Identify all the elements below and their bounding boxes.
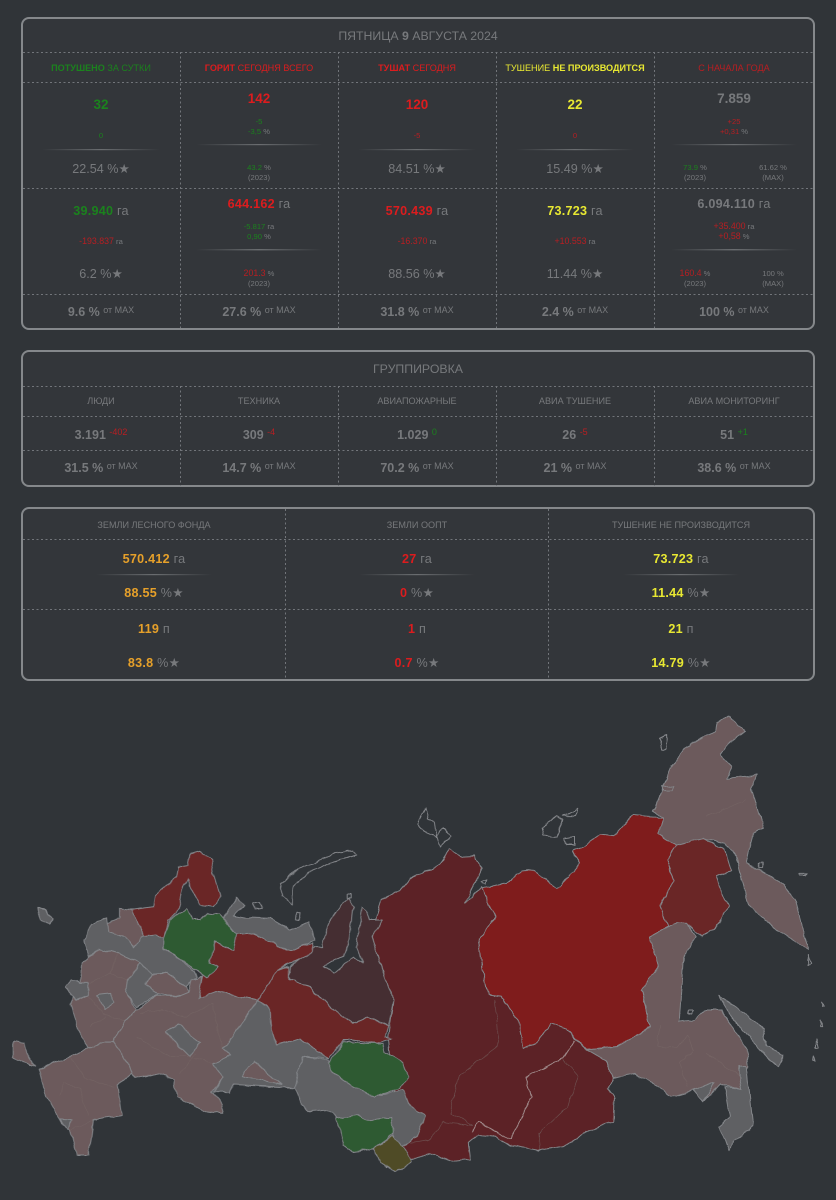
force share of maximum: 21 % (544, 461, 572, 475)
column 1 fire counts (42, 97, 160, 176)
column 2 area: (2023) (248, 279, 270, 288)
region: central Russia (70, 948, 140, 1048)
column 4 area: 11.44 %★ (547, 267, 603, 281)
column 2 area: -5.817 га (244, 222, 275, 231)
islands: eastern (417, 735, 823, 1060)
force counts: -5 (580, 427, 588, 437)
column 3 area: 570.439 га (386, 204, 448, 218)
region: Grey north-west (83, 918, 197, 987)
region: Arkhangelsk (162, 908, 237, 978)
region: Sakhalin (718, 995, 783, 1067)
force share of maximum: от MAX (423, 461, 454, 471)
column 5 area: (MAX) (762, 279, 784, 288)
force share of maximum: 14.7 % (222, 461, 261, 475)
force counts: 0 (432, 427, 437, 437)
column: protected areas: 1 п (408, 622, 426, 636)
column 1 area (73, 204, 129, 281)
share of maximum row: 100 % (699, 305, 735, 319)
column: no extinguishing: 21 п (668, 622, 694, 636)
panel: forces deployed (22, 351, 814, 486)
force share of maximum: 38.6 % (697, 461, 736, 475)
column 3 fire counts: 84.51 %★ (388, 162, 446, 176)
region: Altai (337, 1115, 393, 1152)
column header: since start of year: С НАЧАЛА ГОДА (698, 63, 771, 73)
force share of maximum: от MAX (265, 461, 296, 471)
column: protected areas: ЗЕМЛИ ООПТ (387, 520, 448, 530)
column 1 fire counts: 22.54 %★ (72, 162, 130, 176)
column: protected areas: 27 га (402, 552, 432, 566)
column header: being extinguished: ТУШАТ СЕГОДНЯ (378, 63, 456, 73)
column 2 area: 201.3 % (244, 268, 275, 278)
force counts: 3.191 (75, 428, 106, 442)
region: Kaliningrad (37, 908, 53, 925)
column 3 fire counts: 120 (406, 97, 428, 112)
column 5 fire counts (671, 91, 797, 182)
column 2 area: 0,90 % (247, 232, 271, 241)
column header: burning: ГОРИТ СЕГОДНЯ ВСЕГО (205, 63, 313, 73)
force share of maximum (64, 461, 771, 475)
column: forest fund lands: 119 п (138, 622, 170, 636)
column 5 area: 6.094.110 га (697, 197, 771, 211)
column 5 area: 100 % (762, 269, 784, 278)
column: forest fund lands: 83.8 %★ (128, 656, 180, 670)
column 2 area (196, 197, 322, 288)
column: forest fund lands (96, 520, 212, 670)
share of maximum row: 2.4 % (542, 305, 574, 319)
column 4 fire counts: 22 (567, 97, 583, 112)
region: Crimea (13, 1042, 35, 1067)
region: Pink north-west (107, 908, 145, 947)
column 1 fire counts: 32 (93, 97, 109, 112)
column 5 fire counts: 7.859 (717, 91, 751, 106)
column 5 fire counts: (2023) (684, 173, 706, 182)
column 2 fire counts: 142 (248, 91, 270, 106)
column: forest fund lands: 570.412 га (123, 552, 185, 566)
force counts: +1 (738, 427, 748, 437)
column 3 fire counts (358, 97, 476, 176)
column 5 area (671, 197, 797, 288)
column 4 area: +10.553 га (555, 236, 596, 246)
share of maximum row: 27.6 % (222, 305, 261, 319)
column 4 area (547, 204, 603, 281)
force counts: -402 (109, 427, 127, 437)
region: Khabarovsk and Amur (587, 923, 748, 1102)
column labels: ТЕХНИКА (238, 396, 281, 406)
column: protected areas (359, 520, 475, 670)
column 2 area: 644.162 га (228, 197, 290, 211)
column: no extinguishing: ТУШЕНИЕ НЕ ПРОИЗВОДИТСЯ (612, 520, 750, 530)
region: Taymyr strip (288, 898, 393, 1027)
force counts: 26 (562, 428, 576, 442)
column labels: АВИА МОНИТОРИНГ (688, 396, 780, 406)
force counts: 309 (243, 428, 264, 442)
region: Magadan (660, 838, 732, 937)
force counts: 1.029 (397, 428, 428, 442)
column 1 fire counts: 0 (99, 131, 103, 140)
share of maximum row: от MAX (103, 305, 134, 315)
share of maximum row: 31.8 % (380, 305, 419, 319)
region: Nenets (220, 897, 315, 950)
force share of maximum: от MAX (740, 461, 771, 471)
region: Volga (113, 977, 258, 1113)
region: Komi (198, 933, 313, 1000)
region: Krasnoyarsk and south Siberia (372, 848, 614, 1167)
column 5 fire counts: +25 (728, 117, 740, 126)
column header: extinguished: ПОТУШЕНО ЗА СУТКИ (51, 63, 151, 73)
region: pink Kurgan (242, 1062, 282, 1085)
region: Primorye (718, 1067, 753, 1152)
share of maximum row (68, 305, 769, 319)
region: Samara (165, 1025, 200, 1057)
column labels: АВИАПОЖАРНЫЕ (377, 396, 457, 406)
force share of maximum: от MAX (107, 461, 138, 471)
column 5 fire counts: +0,31 % (720, 127, 748, 136)
column 5 area: +35.400 га (714, 221, 755, 231)
share of maximum row: от MAX (738, 305, 769, 315)
region: Omsk and Novosibirsk (295, 1057, 425, 1148)
column: protected areas: 0.7 %★ (394, 656, 440, 670)
column 2 fire counts: -5 (256, 117, 262, 126)
region: Urals (213, 1000, 328, 1092)
region: grey centre (127, 963, 158, 1007)
column 4 fire counts: 0 (573, 131, 577, 140)
title: date: ПЯТНИЦА 9 АВГУСТА 2024 (338, 29, 498, 43)
column 1 area: -193.837 га (79, 236, 124, 246)
column: protected areas: 0 %★ (400, 586, 434, 600)
column: no extinguishing (612, 520, 750, 670)
column 2 fire counts: -3,5 % (248, 127, 270, 136)
column labels: ЛЮДИ (87, 396, 115, 406)
column 3 area: 88.56 %★ (388, 267, 446, 281)
column 1 area: 39.940 га (73, 204, 129, 218)
column 5 fire counts: 61.62 % (759, 163, 787, 172)
region: Tomsk (328, 1042, 408, 1097)
region: Smolensk (65, 978, 88, 1000)
column 2 fire counts (196, 91, 322, 182)
column 3 area (386, 204, 448, 281)
map: eastern regions (372, 715, 823, 1167)
region: Chukotka and Kamchatka (653, 715, 808, 950)
column 3 fire counts: -5 (414, 131, 420, 140)
map of Russia (13, 715, 823, 1172)
column 2 fire counts: (2023) (248, 173, 270, 182)
force share of maximum: 31.5 % (64, 461, 103, 475)
column labels (87, 396, 780, 406)
panel: daily fire statistics (22, 18, 814, 329)
force counts: -4 (267, 427, 275, 437)
share of maximum row: от MAX (265, 305, 296, 315)
column 5 fire counts: 73.9 % (683, 163, 707, 172)
column: no extinguishing: 11.44 %★ (652, 586, 710, 600)
region: Yakutia (478, 815, 677, 1049)
column header: no extinguishing: ТУШЕНИЕ НЕ ПРОИЗВОДИТСЯ (505, 63, 645, 73)
region: Jewish autonomous (693, 1082, 715, 1102)
region: south (38, 1042, 132, 1155)
column 5 fire counts: (MAX) (762, 173, 784, 182)
panel: land categories (22, 508, 814, 680)
force share of maximum: от MAX (576, 461, 606, 471)
column 5 area: +0,58 % (718, 231, 750, 241)
column 4 fire counts: 15.49 %★ (546, 162, 604, 176)
column: forest fund lands: 88.55 %★ (124, 586, 184, 600)
region: Moscow (97, 993, 113, 1010)
column: no extinguishing: 73.723 га (653, 552, 709, 566)
column 4 fire counts (516, 97, 634, 176)
column 5 area: (2023) (684, 279, 706, 288)
share of maximum row: от MAX (577, 305, 608, 315)
force share of maximum: 70.2 % (380, 461, 419, 475)
column 3 area: -16.370 га (398, 236, 437, 246)
force counts (75, 427, 748, 442)
column labels: АВИА ТУШЕНИЕ (539, 396, 611, 406)
region: Murmansk and Karelia (132, 851, 220, 938)
region: pink Vologda area (145, 973, 188, 997)
islands: western (253, 851, 357, 920)
column 4 area: 73.723 га (547, 204, 603, 218)
region: Tyva (373, 1135, 412, 1172)
map: western regions (13, 851, 425, 1172)
share of maximum row: от MAX (423, 305, 454, 315)
heading: forces: ГРУППИРОВКА (373, 362, 464, 376)
share of maximum row: 9.6 % (68, 305, 100, 319)
column: no extinguishing: 14.79 %★ (651, 656, 711, 670)
region: Khanty-Mansi (258, 967, 392, 1058)
force counts: 51 (720, 428, 734, 442)
column 1 area: 6.2 %★ (79, 267, 123, 281)
column 2 fire counts: 43.2 % (247, 163, 271, 172)
column: forest fund lands: ЗЕМЛИ ЛЕСНОГО ФОНДА (97, 520, 212, 530)
column 5 area: 160.4 % (680, 268, 711, 278)
